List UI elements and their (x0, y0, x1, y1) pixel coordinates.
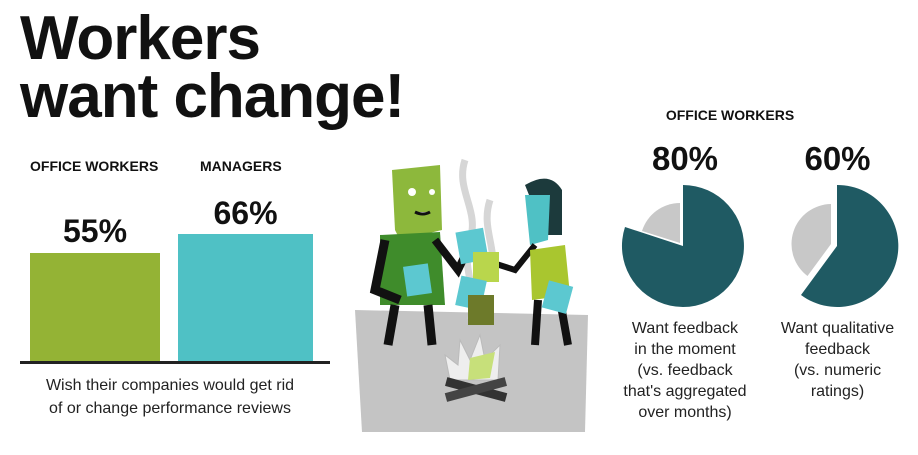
caption: (vs. numeric (794, 362, 881, 379)
bar: office workers (30, 253, 160, 362)
value 55%: 55% (63, 213, 127, 249)
heading: office workers: OFFICE WORKERS (666, 107, 794, 123)
label: office workers: OFFICE WORKERS (30, 158, 158, 174)
title: Workers (20, 4, 260, 73)
caption: Want feedback (632, 320, 738, 337)
title (20, 4, 404, 131)
caption: ratings) (811, 383, 864, 400)
illustration (355, 159, 588, 432)
title: want change! (20, 62, 404, 131)
value 66%: 66% (213, 195, 278, 231)
caption: of or change performance reviews (49, 400, 291, 417)
bar chart (20, 195, 330, 364)
caption (623, 320, 747, 421)
caption (46, 377, 294, 417)
bar: managers (178, 234, 313, 362)
value 80%: 80% (652, 140, 718, 177)
man (375, 165, 470, 345)
pie: 80% (622, 140, 747, 421)
caption: that's aggregated (623, 383, 747, 400)
woman (490, 179, 573, 345)
value 60%: 60% (804, 140, 871, 177)
floor (355, 310, 588, 432)
papers (455, 228, 499, 325)
label: managers: MANAGERS (200, 158, 282, 174)
caption: (vs. feedback (637, 362, 733, 379)
caption: in the moment (634, 341, 736, 358)
caption: feedback (805, 341, 870, 358)
pie: 60% (781, 140, 898, 400)
caption (781, 320, 894, 400)
fire (445, 335, 507, 402)
caption: Wish their companies would get rid (46, 377, 294, 394)
caption: Want qualitative (781, 320, 894, 337)
smoke (463, 160, 493, 320)
caption: over months) (638, 404, 732, 421)
